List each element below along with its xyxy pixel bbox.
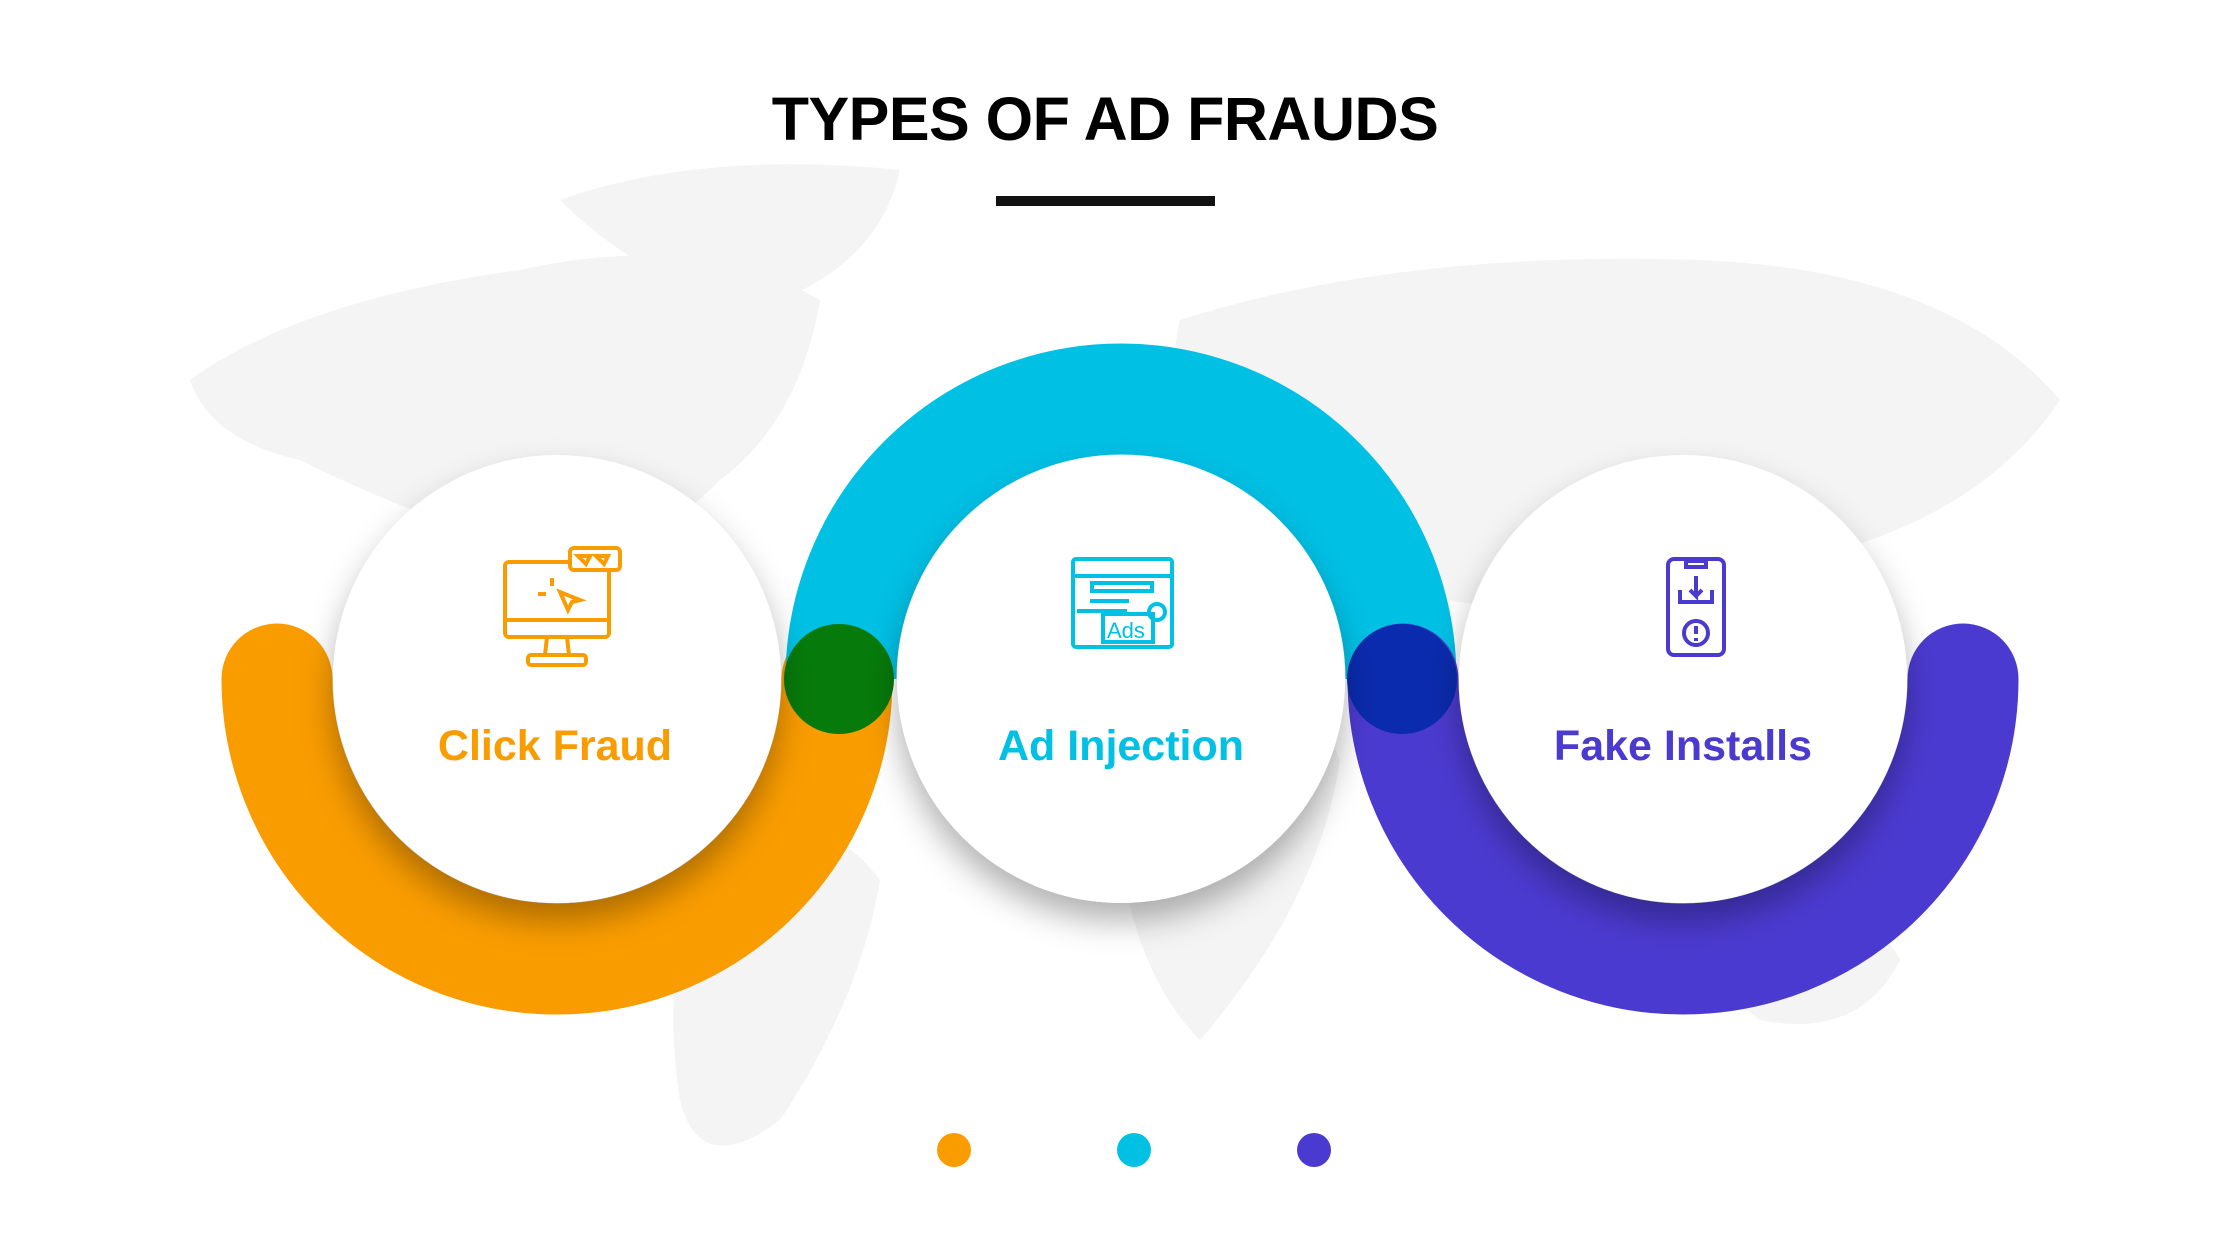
white circle right [1459, 455, 1907, 903]
overlap: dark blue [1347, 624, 1457, 734]
icon: ads browser [1073, 559, 1172, 647]
label: Fake Installs: Fake Installs [1554, 722, 1812, 770]
title underline [996, 196, 1215, 206]
ring: cyan [841, 399, 1401, 679]
icon: monitor click [505, 548, 620, 665]
label: Click Fraud: Click Fraud [438, 722, 672, 770]
icon: ads browser: Ads [1107, 618, 1145, 643]
title: TYPES OF AD FRAUDS [772, 85, 1438, 153]
ring: orange [277, 679, 837, 959]
dots indicator [937, 1133, 1331, 1167]
white circle middle [897, 455, 1345, 903]
overlap: green [784, 624, 894, 734]
icon: phone install [1668, 559, 1724, 655]
white circle left [333, 455, 781, 903]
ring: purple [1403, 679, 1963, 959]
label: Ad Injection: Ad Injection [998, 722, 1244, 770]
